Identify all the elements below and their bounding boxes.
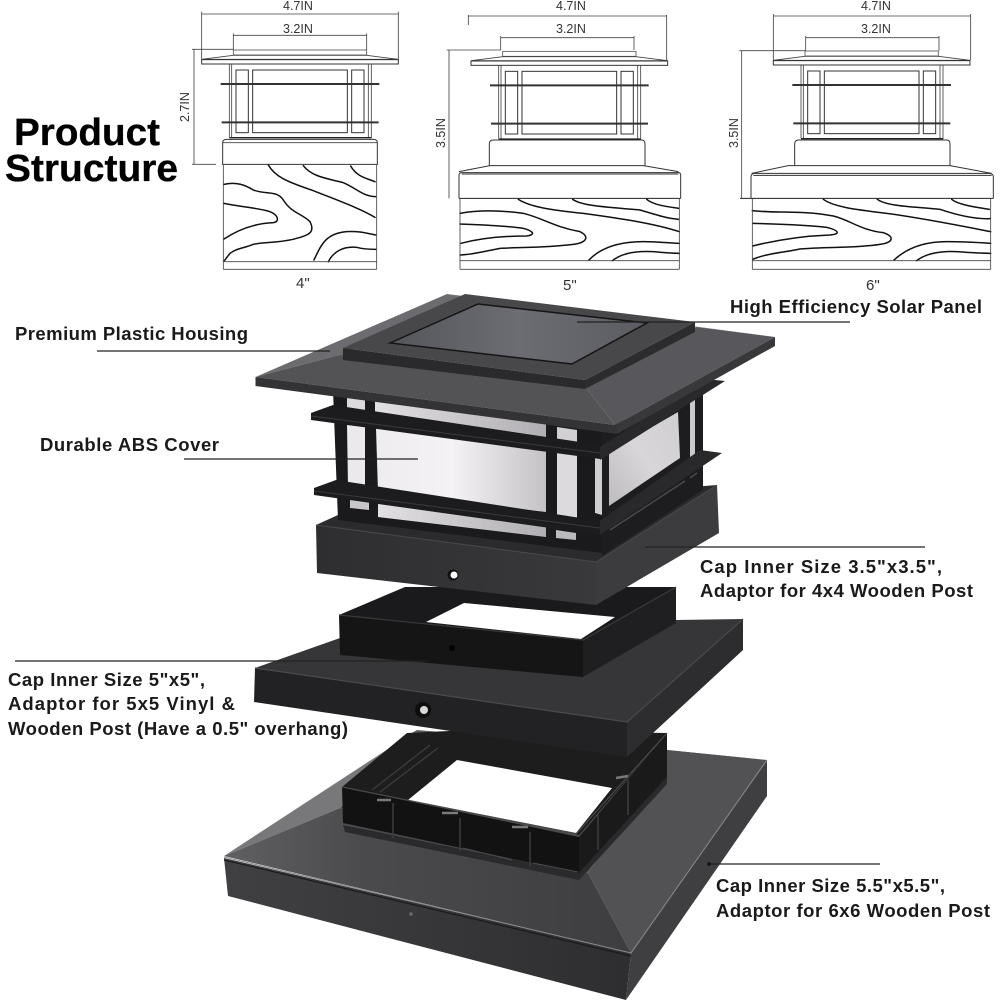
lantern body: [311, 379, 725, 556]
dimension labels: 5 inch: [434, 0, 586, 294]
roof: [256, 294, 775, 434]
label: premium plastic housing: Premium Plastic Housing: [15, 323, 248, 344]
screw hole: [448, 570, 458, 580]
wood grain 6 inch: [752, 199, 991, 261]
label: cap 5 inch: Adaptor for 5x5 Vinyl &: [8, 693, 235, 714]
dimension labels: 5 inch: 3.2IN: [556, 22, 586, 36]
adaptor plate 6x6: [224, 730, 767, 1000]
dimension labels: 5 inch: 3.5IN: [434, 118, 448, 148]
dimension labels: 4 inch: 2.7IN: [178, 92, 192, 122]
adaptor plate 5x5: [254, 619, 743, 757]
label: cap 3.5 inch: Cap Inner Size 3.5"x3.5",: [700, 556, 942, 577]
dimension labels: 6 inch: 3.5IN: [727, 118, 741, 148]
drawing: 5 inch post cap: [447, 15, 681, 269]
title: Product: [14, 112, 160, 154]
plastic inner ring 6x6: [342, 730, 667, 880]
drawing: 4 inch post cap: [192, 12, 398, 269]
solar panel: [390, 304, 647, 364]
label: cap 5 inch: Cap Inner Size 5"x5",: [8, 669, 205, 690]
label: cap 3.5 inch: Adaptor for 4x4 Wooden Post: [700, 580, 973, 601]
title: [5, 112, 178, 190]
label: cap 5.5 inch: [710, 864, 990, 921]
label: cap 5.5 inch: Adaptor for 6x6 Wooden Post: [716, 900, 990, 921]
wood grain 5 inch: [460, 199, 679, 261]
dimension labels: 6 inch: 6": [866, 277, 880, 294]
label: solar panel: High Efficiency Solar Panel: [730, 296, 982, 317]
dimension labels: 4 inch: 4": [296, 275, 310, 292]
label: ABS cover: Durable ABS Cover: [40, 434, 219, 455]
wood grain 4 inch: [224, 165, 376, 262]
dimension labels: 4 inch: 3.2IN: [283, 22, 313, 36]
dimension labels: 5 inch: 5": [563, 277, 577, 294]
frosted window panes: [347, 397, 695, 540]
label: cap 5 inch: Wooden Post (Have a 0.5" overhang): [8, 718, 348, 739]
drawing: 6 inch post cap: [739, 14, 993, 269]
dimension labels: 4 inch: [178, 0, 313, 292]
horizontal rails: [311, 379, 725, 535]
dimension labels: 6 inch: 3.2IN: [861, 22, 891, 36]
dimension labels: 6 inch: [727, 0, 891, 294]
label: cap 5 inch: [8, 661, 429, 739]
label: cap 3.5 inch: [645, 547, 973, 601]
solar panel frame: [343, 294, 695, 389]
screw hole: [415, 702, 431, 718]
title: Structure: [5, 148, 178, 190]
label: cap 5.5 inch: Cap Inner Size 5.5"x5.5",: [716, 875, 945, 896]
ledge slots: [595, 473, 697, 533]
collar 5x5: [339, 587, 676, 677]
base cap 4x4: [316, 485, 719, 605]
